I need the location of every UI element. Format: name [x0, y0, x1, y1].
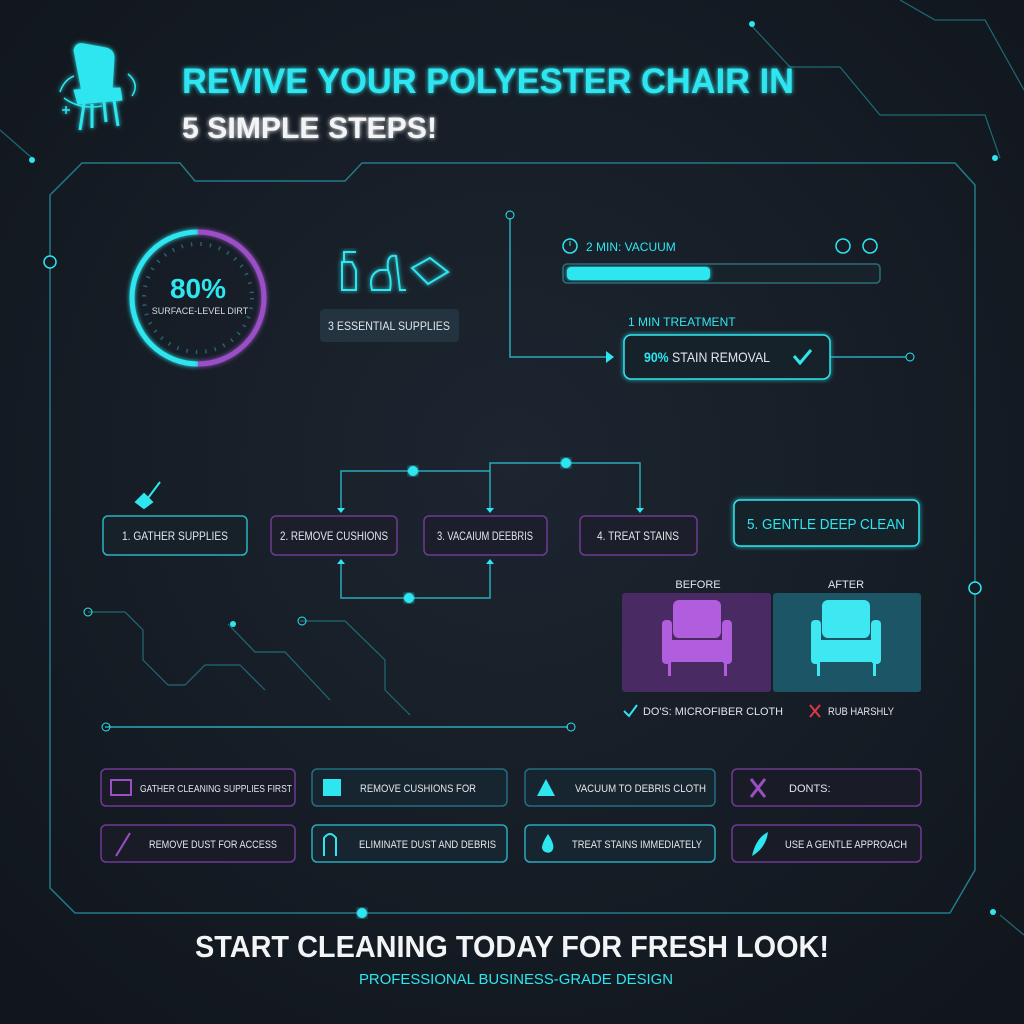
- title: REVIVE YOUR POLYESTER CHAIR IN: [182, 62, 794, 101]
- step 1: [103, 516, 247, 555]
- do's and don'ts: DO'S: MICROFIBER CLOTH: [643, 706, 783, 718]
- icon: chair: [60, 44, 135, 130]
- icons: supplies: [342, 252, 448, 290]
- tip: treat stains: TREAT STAINS IMMEDIATELY: [572, 839, 703, 851]
- tip: eliminate dust: [312, 825, 507, 862]
- ring chart: 80%: SURFACE-LEVEL DIRT: [152, 306, 249, 316]
- title: 5 SIMPLE STEPS!: [182, 112, 437, 145]
- step 4: [580, 516, 697, 555]
- tip: donts: [732, 769, 921, 806]
- tip: vacuum: [525, 769, 715, 806]
- connectors top-right: [510, 218, 906, 357]
- tip: eliminate dust: ELIMINATE DUST AND DEBRIS: [359, 839, 496, 851]
- callout: 90% stain removal: 1 MIN TREATMENT: [628, 315, 736, 329]
- tip: treat stains: [525, 825, 715, 862]
- do's and don'ts: [624, 705, 895, 718]
- tip: gentle approach: [732, 825, 921, 862]
- tip: donts: DONTS:: [789, 783, 831, 795]
- step 3: 3. VACAIUM DEEBRIS: [437, 529, 533, 543]
- step 2: [271, 516, 397, 555]
- icon: broom: [136, 482, 160, 508]
- tip: remove dust: REMOVE DUST FOR ACCESS: [149, 839, 277, 851]
- progress: 2 min vacuum: [563, 239, 880, 283]
- grid of tips: [101, 769, 921, 862]
- tip: gather cleaning supplies: GATHER CLEANING SUPPLIES FIRST: [140, 784, 292, 795]
- footer: PROFESSIONAL BUSINESS-GRADE DESIGN: [359, 971, 673, 988]
- tip: remove dust: [101, 825, 295, 862]
- step 5: [734, 500, 919, 546]
- footer: START CLEANING TODAY FOR FRESH LOOK!: [195, 929, 829, 964]
- ring chart: 80%: 80%: [170, 273, 226, 304]
- tip: remove cushions: REMOVE CUSHIONS FOR: [360, 783, 476, 795]
- do's and don'ts: RUB HARSHLY: [828, 706, 895, 718]
- step 5: 5. GENTLE DEEP CLEAN: [747, 516, 905, 533]
- step 4: 4. TREAT STAINS: [597, 529, 679, 543]
- before/after comparison: BEFORE: [675, 579, 721, 591]
- before/after comparison: [622, 579, 921, 692]
- label: 3 essential supplies: 3 ESSENTIAL SUPPLIES: [328, 319, 450, 333]
- tip: gentle approach: USE A GENTLE APPROACH: [785, 839, 907, 851]
- callout: 90% stain removal: [624, 315, 830, 379]
- tip: remove cushions: [312, 769, 507, 806]
- title: [182, 62, 794, 145]
- tip: gather cleaning supplies: [101, 769, 295, 806]
- step 2: 2. REMOVE CUSHIONS: [280, 529, 388, 543]
- flow connectors: [105, 463, 640, 727]
- ring chart: 80%: [132, 232, 264, 364]
- step 1: 1. GATHER SUPPLIES: [122, 529, 228, 543]
- progress: 2 min vacuum: 2 MIN: VACUUM: [586, 240, 676, 254]
- before/after comparison: AFTER: [828, 579, 864, 591]
- callout: 90% stain removal: 90% STAIN REMOVAL: [644, 349, 770, 365]
- step 3: [424, 516, 547, 555]
- footer: [195, 929, 829, 988]
- label: 3 essential supplies: [320, 309, 459, 342]
- tip: vacuum: VACUUM TO DEBRIS CLOTH: [575, 783, 706, 795]
- frame: [50, 163, 975, 913]
